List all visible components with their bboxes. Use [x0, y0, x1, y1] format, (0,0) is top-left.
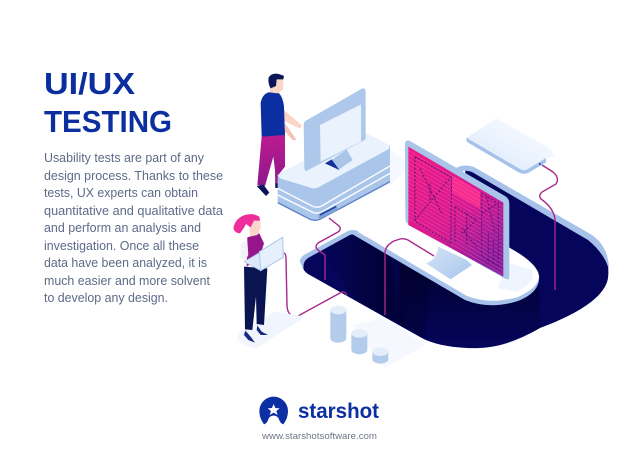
legs: [257, 131, 285, 186]
body text: data have been analyzed, it is: [44, 256, 207, 270]
screen: [408, 147, 503, 277]
stand: [332, 149, 353, 170]
arm: [241, 241, 248, 262]
shadow: [237, 312, 305, 348]
body text: and perform an analysis and: [44, 221, 201, 235]
dark U-shaped pit: [300, 166, 609, 348]
neck and head: [270, 78, 283, 93]
cylinders: [330, 306, 388, 364]
legs: [244, 267, 267, 330]
shoes: [257, 185, 269, 196]
laptop: [259, 237, 283, 271]
torso: [247, 233, 264, 267]
shade below platform: [400, 262, 540, 348]
body text: [44, 151, 223, 305]
hair: [233, 214, 260, 233]
desk: [278, 131, 390, 220]
title: TESTING: [44, 105, 172, 139]
body text: much easier and more solvent: [44, 274, 210, 288]
platform edge: [352, 232, 539, 305]
rim top-right: [453, 166, 609, 270]
man: [257, 74, 302, 196]
logo wordmark: starshot: [298, 399, 379, 423]
body text: tests, UX experts can obtain: [44, 186, 198, 200]
title: UI/UX: [44, 67, 136, 101]
floor shadows: [352, 150, 425, 368]
white platform: [352, 190, 539, 305]
rim back-left: [300, 230, 366, 270]
back monitor on desk: [278, 88, 390, 220]
front monitor: [405, 141, 509, 279]
body text: quantitative and qualitative data: [44, 204, 223, 218]
shirt: [261, 92, 285, 137]
frame: [405, 141, 509, 279]
box device: [466, 118, 555, 174]
website url: www.starshotsoftware.com: [261, 431, 377, 442]
monitor frame: [304, 88, 366, 171]
cables: [284, 165, 557, 316]
title: [44, 67, 172, 139]
stand: [426, 247, 472, 279]
arms: [272, 107, 302, 129]
logo icon: [259, 397, 288, 424]
body text: Usability tests are part of any: [44, 151, 205, 165]
neck and head: [249, 218, 261, 237]
body text: investigation. Once all these: [44, 239, 199, 253]
body text: design process. Thanks to these: [44, 169, 223, 183]
heels: [244, 331, 255, 343]
woman: [233, 214, 305, 348]
body text: to develop any design.: [44, 291, 168, 305]
pit inner fold: [318, 234, 405, 327]
